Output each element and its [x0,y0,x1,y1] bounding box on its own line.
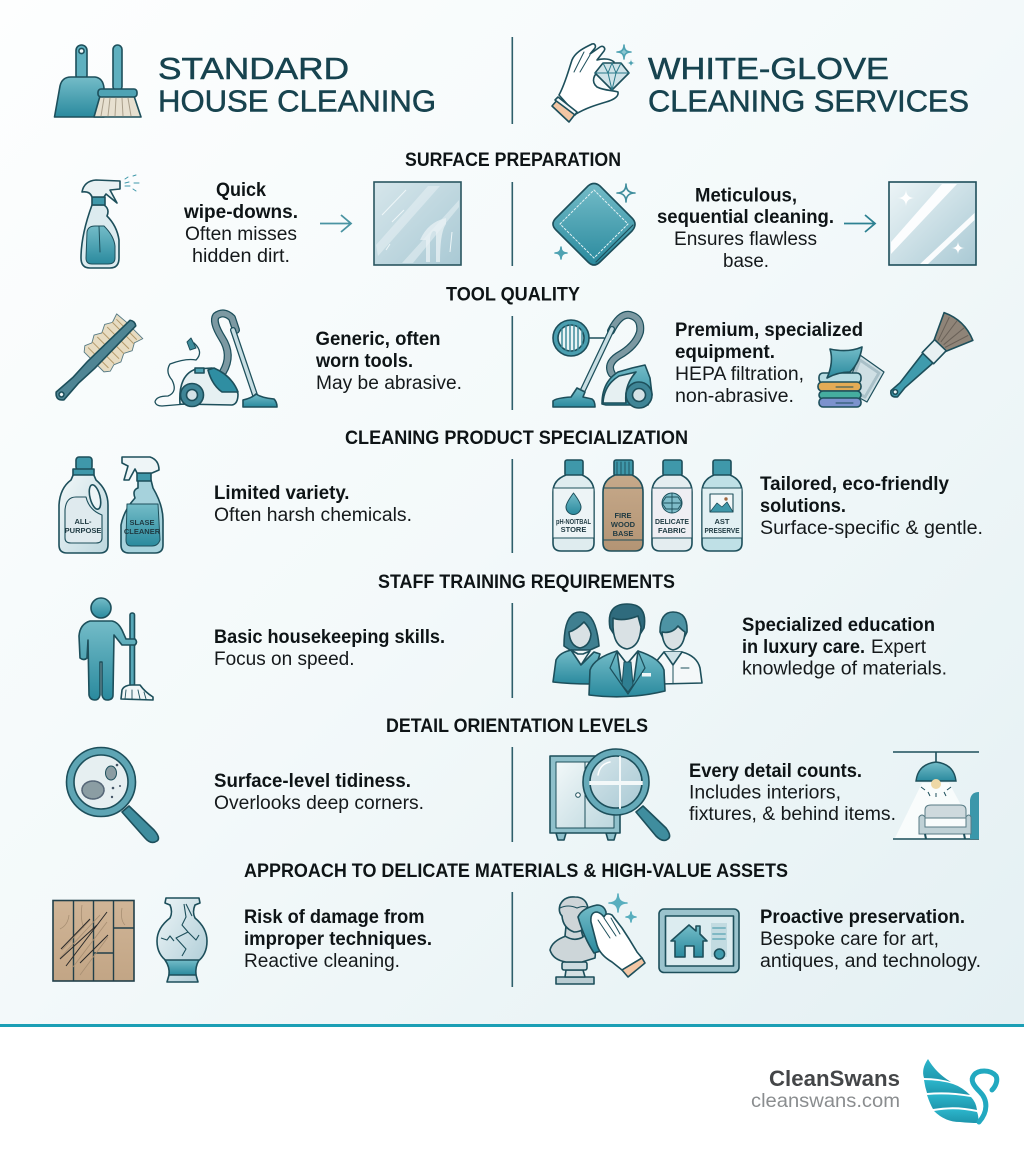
text: specialized education: in luxury care. [742,637,865,658]
text: meticulous sequential cleaning: base. [723,251,769,272]
text: limited variety: Limited variety. [214,483,350,504]
center divider [512,182,513,266]
title: standard: STANDARD [158,51,349,86]
text: premium specialized equipment [675,320,863,407]
figure: man in suit [589,604,665,697]
text: tailored eco-friendly: solutions. [760,496,846,517]
text: generic worn tools: May be abrasive. [316,373,462,394]
row: detail orientation levels [66,716,979,842]
text: meticulous sequential cleaning: sequential cleaning. [657,207,834,228]
text: every detail counts: Every detail counts. [689,761,862,782]
text: surface-level tidiness: Overlooks deep corners. [214,793,424,814]
arrow: standard surface [320,215,351,232]
text: quick wipe-downs: hidden dirt. [192,246,290,267]
row: cleaning product specialization [59,428,983,553]
icon: glass cleaner spray: CLEANER [124,527,161,536]
heading: approach to delicate materials: APPROACH TO DELICATE MATERIALS & HIGH-VALUE ASSETS [244,861,788,882]
icon: glove wiping marble bust [550,894,645,984]
text: tailored eco-friendly: Tailored, eco-friendly [760,474,949,495]
center divider [512,892,513,987]
text: premium specialized equipment: equipment. [675,342,775,363]
icon: spray bottle [81,175,139,268]
text: specialized education: Expert [871,637,927,658]
text: quick wipe-downs: wipe-downs. [183,202,298,223]
text: risk of damage: Reactive cleaning. [244,951,400,972]
text: generic worn tools: Generic, often [316,329,440,350]
text: surface-level tidiness [214,771,424,814]
text: limited variety: Often harsh chemicals. [214,505,412,526]
heading: staff training requirements: STAFF TRAINING REQUIREMENTS [378,572,675,593]
icon: housekeeper with mop [79,598,153,700]
brand name: CleanSwans [769,1066,900,1091]
icon: fine wood bottle: WOOD [611,520,636,529]
title: cleaning services: CLEANING SERVICES [648,84,969,118]
icon: streaky glass [374,182,461,265]
center divider [512,316,513,410]
text: proactive preservation: antiques, and technology. [760,951,981,972]
text: risk of damage [244,907,432,972]
figure: woman in uniform [553,612,600,684]
icon: pendant lamp and sofa [893,752,979,839]
icon: smart home tablet [659,909,739,972]
icon: all-purpose jug: PURPOSE [65,526,101,535]
icon: delicate fabric bottle [652,460,692,551]
figure: man in white coat [655,612,702,684]
footer band [0,1025,1024,1154]
heading: detail orientation levels: DETAIL ORIENTATION LEVELS [386,716,648,737]
heading: tool quality: TOOL QUALITY [446,284,580,306]
row: tool quality [44,284,976,412]
text: proactive preservation: Proactive preservation. [760,907,965,928]
header: white-glove cleaning services [552,44,969,122]
icon: delicate fabric bottle: FABRIC [658,526,687,535]
icon: ph-neutral bottle: STORE [561,525,586,534]
icon: fine wood bottle: BASE [613,529,633,538]
icon: scratched parquet floor [53,900,134,981]
text: generic worn tools: worn tools. [315,351,413,372]
icon: delicate fabric bottle: DELICATE [655,517,689,526]
heading: cleaning product specialization: CLEANING PRODUCT SPECIALIZATION [345,428,688,449]
center divider [512,459,513,553]
icon: all-purpose jug: ALL- [74,517,92,526]
center divider [512,747,513,842]
text: meticulous sequential cleaning: Ensures flawless [674,229,817,250]
title: white-glove: WHITE-GLOVE [648,51,889,86]
header: standard house cleaning [54,45,436,118]
text: risk of damage: Risk of damage from [244,907,424,928]
icon: folded cloths [818,347,884,407]
row: surface preparation [81,150,976,272]
text: meticulous sequential cleaning [657,186,834,272]
icon: white glove holding diamond [552,44,635,122]
icon: glass cleaner spray: SLASE [129,518,155,527]
text: premium specialized equipment: Premium, specialized [675,320,863,341]
text: quick wipe-downs: Quick [216,180,266,201]
arrow: white-glove surface [844,215,875,232]
text: proactive preservation [760,907,981,972]
icon: specialized staff team [553,604,702,697]
text: quick wipe-downs [183,180,298,267]
text: tailored eco-friendly: Surface-specific & gentle. [760,518,983,539]
row: delicate materials and high-value assets [53,861,981,987]
text: basic housekeeping skills [214,627,445,670]
icon: art preserve bottle [702,460,742,551]
footer accent line [0,1024,1024,1027]
text: tailored eco-friendly [760,474,983,539]
row: staff training requirements [79,572,947,700]
text: premium specialized equipment: non-abrasive. [675,386,794,407]
icon: fine wood bottle [603,460,643,551]
text: specialized education [742,615,947,680]
text: generic worn tools [315,329,462,394]
icon: cabinet with magnifier [550,749,670,840]
icon: glass cleaner spray [121,457,163,553]
center divider [512,603,513,698]
text: premium specialized equipment: HEPA filtration, [675,364,804,385]
heading: surface preparation: SURFACE PREPARATION [405,150,621,171]
icon: art preserve bottle: AST [714,517,730,526]
text: meticulous sequential cleaning: Meticulous, [695,186,797,206]
icon: ph-neutral bottle: pH-NOITBAL [556,517,591,526]
icon: premium detail brush [877,309,976,409]
text: basic housekeeping skills: Focus on speed. [214,649,354,670]
icon: ph-neutral bottle [553,460,594,551]
text: quick wipe-downs: Often misses [185,224,297,245]
brand url: cleanswans.com [751,1090,900,1112]
text: every detail counts [689,761,896,825]
icon: basic vacuum [155,313,277,407]
icon: magnifier over surface dust [66,748,158,842]
text: specialized education: knowledge of materials. [742,658,947,680]
text: every detail counts: fixtures, & behind items. [689,804,896,825]
icon: clean glass [889,182,976,265]
footer [0,1024,1024,1154]
text: basic housekeeping skills: Basic housekeeping skills. [214,627,445,648]
icon: cracked vase [157,898,207,982]
text: risk of damage: improper techniques. [244,929,432,950]
icon: all-purpose jug [59,457,108,553]
text: limited variety [214,483,412,526]
title: house cleaning: HOUSE CLEANING [158,84,436,118]
text: every detail counts: Includes interiors, [689,782,841,804]
icon: fine wood bottle: FIRE [614,511,632,520]
text: specialized education: Specialized education [742,615,935,636]
icon: premium vacuum with hepa filter [553,315,652,408]
text: proactive preservation: Bespoke care for art, [760,929,939,950]
icon: art preserve bottle: PRESERVE [704,526,740,535]
icon: microfiber cloth [553,184,635,265]
text: surface-level tidiness: Surface-level tidiness. [214,771,411,792]
logo: swan [923,1059,997,1123]
icon: worn scrub brush [44,309,147,412]
center divider: header [512,37,513,124]
icon: dustpan and brush [54,45,141,117]
